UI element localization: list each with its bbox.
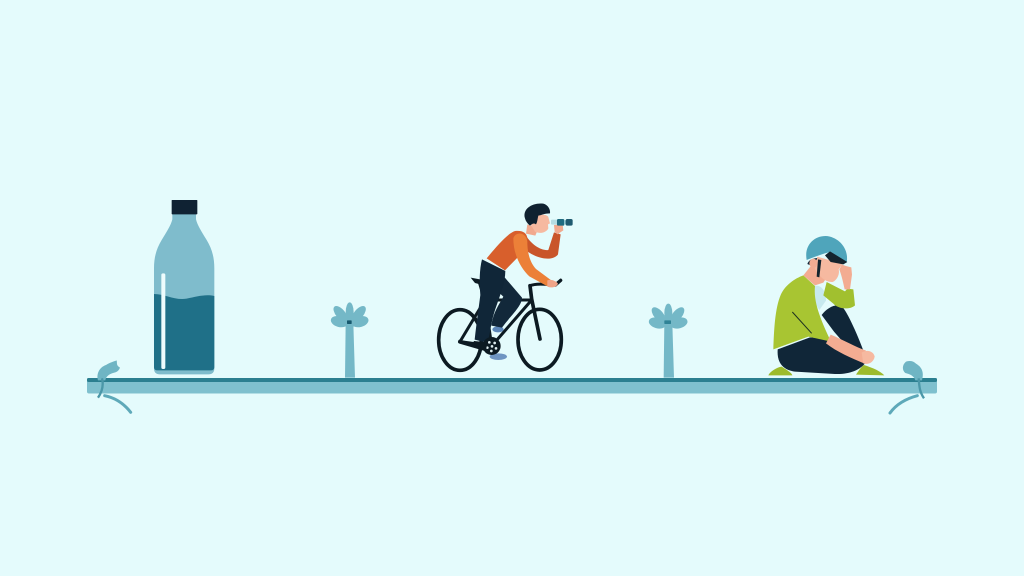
torso	[773, 275, 831, 349]
near shoe	[490, 353, 507, 360]
right shoe	[856, 365, 884, 375]
icon: left marker post	[330, 302, 370, 378]
arm fold line	[792, 312, 812, 333]
hair	[807, 258, 817, 267]
icon: right marker post	[648, 304, 689, 378]
far leg	[487, 270, 522, 328]
near arm	[513, 233, 551, 287]
pedal and shoe	[473, 341, 487, 350]
head	[814, 257, 843, 282]
left shoe	[768, 367, 792, 375]
helmet strap	[817, 259, 821, 277]
forearm	[826, 335, 866, 363]
neck	[803, 265, 828, 285]
near leg	[475, 259, 505, 343]
icon: water bottle	[154, 200, 214, 374]
bottle being drunk from	[551, 219, 573, 226]
hair	[524, 203, 550, 226]
ear	[809, 259, 817, 268]
icon: cyclist drinking	[439, 203, 573, 370]
drinking hand	[554, 224, 563, 234]
trousers	[778, 337, 865, 374]
neck	[526, 224, 538, 236]
chainring	[483, 337, 501, 355]
raised hand	[839, 265, 852, 289]
bottle body	[154, 214, 214, 374]
icon: seated exhausted cyclist	[768, 236, 884, 375]
far foot	[492, 326, 504, 332]
bottle cap	[172, 200, 197, 214]
near hand	[547, 280, 558, 287]
water fill	[154, 294, 214, 370]
icon: right end knot	[890, 361, 924, 413]
head	[531, 215, 550, 233]
icon: left end knot	[97, 360, 131, 412]
timeline bar	[87, 378, 937, 394]
helmet visor	[825, 251, 847, 264]
bicycle saddle	[471, 278, 483, 285]
raised far leg	[822, 305, 863, 351]
torso	[487, 231, 527, 270]
undershirt patch	[813, 286, 826, 310]
bottle highlight	[161, 273, 165, 369]
hand on foot	[862, 351, 875, 364]
helmet	[806, 236, 847, 263]
bicycle	[439, 280, 561, 370]
far arm	[525, 232, 561, 259]
far arm	[823, 282, 855, 308]
